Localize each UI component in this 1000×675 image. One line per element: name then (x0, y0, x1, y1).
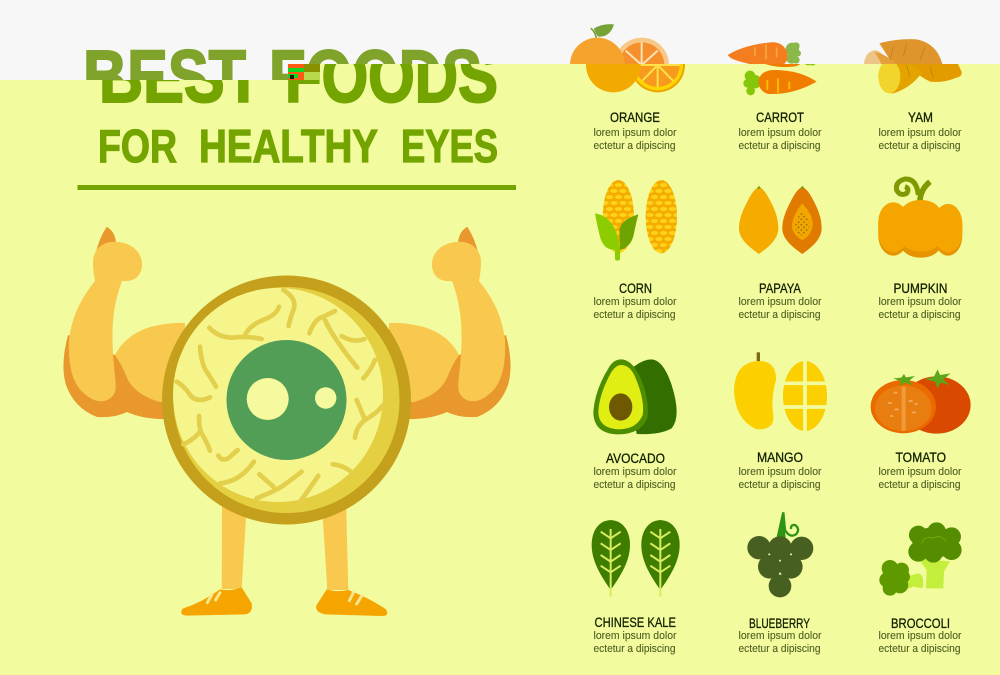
label: corn (594, 281, 677, 321)
label: avocado (594, 451, 677, 491)
label: broccoli: lorem ipsum dolor (878, 630, 962, 642)
eyeball (162, 276, 411, 524)
label: papaya: lorem ipsum dolor (738, 296, 822, 308)
icon: orange (586, 38, 685, 92)
label: chinese kale: lorem ipsum dolor (594, 630, 677, 642)
label: chinese kale (594, 615, 677, 655)
label: carrot: CARROT (756, 110, 804, 125)
label: yam: YAM (908, 110, 933, 125)
glitch block (288, 64, 320, 80)
icon: mango (734, 352, 828, 432)
right shoe (316, 589, 387, 616)
title: EYES (401, 120, 498, 172)
large highlight (247, 378, 289, 420)
label: broccoli: ectetur a dipiscing (878, 643, 960, 655)
icon: chinese kale (592, 520, 680, 597)
label: yam (878, 110, 962, 152)
iris (226, 340, 346, 460)
icon: pumpkin (878, 179, 962, 258)
icon: corn (595, 180, 677, 261)
label: carrot (738, 110, 822, 152)
label: corn: ectetur a dipiscing (594, 309, 676, 321)
blood veins (177, 290, 383, 502)
label: tomato (878, 450, 962, 491)
label: papaya (738, 281, 822, 321)
label: carrot: lorem ipsum dolor (738, 127, 822, 139)
label: broccoli (878, 616, 962, 655)
mascot: muscular eyeball (63, 227, 511, 616)
icon: yam (878, 39, 962, 93)
label: orange: ectetur a dipiscing (594, 140, 676, 152)
label: pumpkin: PUMPKIN (894, 281, 948, 296)
label: tomato: TOMATO (896, 450, 946, 465)
label: blueberry: lorem ipsum dolor (738, 630, 822, 642)
label: chinese kale: CHINESE KALE (594, 615, 676, 630)
left shoe (181, 587, 252, 616)
label: mango (738, 450, 822, 491)
title fragment: BEST (83, 35, 246, 118)
label: pumpkin: ectetur a dipiscing (878, 309, 960, 321)
label: orange: ORANGE (610, 110, 660, 125)
orange fragment (570, 24, 669, 64)
icon: blueberry (747, 512, 813, 597)
label: tomato: lorem ipsum dolor (878, 466, 962, 478)
icon: broccoli (879, 522, 962, 596)
label: papaya: ectetur a dipiscing (738, 309, 820, 321)
label: mango: lorem ipsum dolor (738, 466, 822, 478)
shifted top layer (86, 24, 942, 80)
label: yam: lorem ipsum dolor (878, 127, 962, 139)
left leg (222, 500, 247, 589)
title fragment: FOODS (269, 35, 482, 118)
right arm (389, 227, 511, 419)
label: corn: lorem ipsum dolor (594, 296, 677, 308)
right leg (322, 500, 348, 590)
label: pumpkin (878, 281, 962, 321)
label: yam: ectetur a dipiscing (878, 140, 960, 152)
icon: tomato (871, 369, 971, 434)
label: broccoli: BROCCOLI (891, 616, 950, 631)
icon: carrots (743, 42, 817, 95)
title fragment (86, 48, 480, 80)
label: papaya: PAPAYA (759, 281, 801, 296)
left arm (63, 227, 185, 419)
label: avocado: AVOCADO (606, 451, 665, 466)
carrot fragment (728, 42, 801, 64)
yam fragment (864, 39, 942, 64)
label: pumpkin: lorem ipsum dolor (878, 296, 962, 308)
label: orange (594, 110, 677, 152)
label: avocado: lorem ipsum dolor (594, 466, 677, 478)
top grey strip (0, 0, 1000, 80)
label: corn: CORN (619, 281, 652, 296)
icon: avocado (593, 359, 677, 434)
label: chinese kale: ectetur a dipiscing (594, 643, 676, 655)
label: avocado: ectetur a dipiscing (594, 479, 676, 491)
title: HEALTHY (199, 120, 378, 172)
label: blueberry: BLUEBERRY (749, 616, 810, 631)
label: blueberry: ectetur a dipiscing (738, 643, 820, 655)
title (98, 35, 498, 172)
label: tomato: ectetur a dipiscing (878, 479, 960, 491)
small highlight (315, 387, 336, 409)
label: blueberry (738, 616, 822, 655)
title: FOR (98, 120, 177, 172)
label: orange: lorem ipsum dolor (594, 127, 677, 139)
title: FOODS (285, 35, 498, 118)
title: BEST (99, 35, 262, 118)
label: mango: ectetur a dipiscing (738, 479, 820, 491)
label: mango: MANGO (757, 450, 803, 465)
title underline (78, 185, 516, 190)
label: carrot: ectetur a dipiscing (738, 140, 820, 152)
icon: papaya (739, 186, 822, 254)
